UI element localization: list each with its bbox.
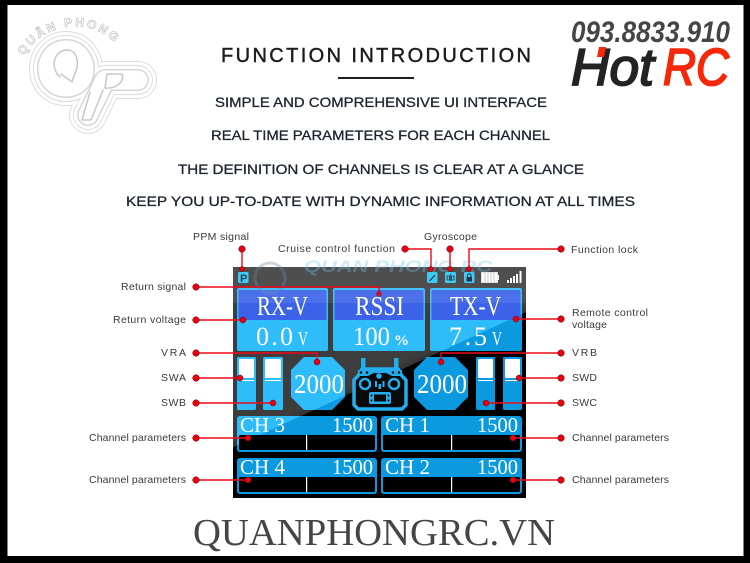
feature list: SIMPLE AND COMPREHENSIVE UI INTERFACE <box>215 94 547 110</box>
channel: CH 3: 1500 <box>332 413 373 437</box>
card: RX-V <box>237 288 328 351</box>
title underline <box>338 77 414 79</box>
brand: HotRC: Hot <box>571 39 657 97</box>
signal bars icon <box>507 271 522 283</box>
status icon: lock <box>464 272 474 283</box>
footer website: QUANPHONGRC.VN <box>193 512 555 554</box>
callout labels: voltage <box>572 319 607 331</box>
card: TX-V: 7.5 <box>449 322 487 351</box>
callout labels: SWD <box>572 372 597 384</box>
channel: CH 4: CH 4 <box>240 455 286 479</box>
card: RX-V: 0.0 <box>256 322 293 351</box>
card: RX-V: RX-V <box>257 291 308 321</box>
card: TX-V: V <box>492 328 502 350</box>
brand: HotRC <box>571 39 729 97</box>
dial: VRA <box>291 357 345 410</box>
callout labels: VRB <box>572 347 597 359</box>
feature list <box>126 94 635 209</box>
callout labels: Channel parameters <box>89 432 186 444</box>
slider: SWB <box>263 357 283 410</box>
callout lines and dots <box>193 246 564 483</box>
slider: SWC <box>476 357 495 410</box>
card: TX-V: TX-V <box>450 291 501 321</box>
feature list: THE DEFINITION OF CHANNELS IS CLEAR AT A GLANCE <box>178 161 584 177</box>
screen watermark <box>255 257 493 293</box>
icon: remote controller <box>354 358 406 409</box>
channel: CH 2 <box>381 455 522 494</box>
slider: SWD <box>503 357 522 410</box>
phone number: 093.8833.910 <box>571 16 730 49</box>
callout labels: Cruise control function <box>278 243 395 255</box>
channel: CH 2: CH 2 <box>385 455 430 479</box>
callout labels: Channel parameters <box>572 474 669 486</box>
callout labels: Return voltage <box>113 314 186 326</box>
feature list: REAL TIME PARAMETERS FOR EACH CHANNEL <box>211 127 550 143</box>
logo: Quan Phong QP watermark <box>48 50 138 120</box>
screen watermark: QUAN PHONG RC <box>304 257 493 276</box>
dial: VRB: 2000 <box>417 369 467 399</box>
channel: CH 3 <box>237 413 377 452</box>
callout labels: Function lock <box>571 244 639 256</box>
slider: SWA <box>237 357 256 410</box>
card: RX-V: V <box>298 328 308 350</box>
callout labels: PPM signal <box>193 231 249 243</box>
battery icon <box>482 272 499 282</box>
card: RSSI: % <box>394 333 409 349</box>
callout labels: Gyroscope <box>424 231 477 243</box>
card: RSSI <box>333 288 425 351</box>
channel: CH 1: 1500 <box>477 413 518 437</box>
feature list: KEEP YOU UP-TO-DATE WITH DYNAMIC INFORMATION AT ALL TIMES <box>126 193 635 209</box>
brand: HotRC: RC <box>663 39 729 97</box>
dial: VRA: 2000 <box>294 369 344 399</box>
callout labels: Remote control <box>572 307 648 319</box>
channel: CH 1 <box>381 413 522 452</box>
logo text: QUÂN PHONG <box>18 18 118 54</box>
callout labels: SWA <box>161 372 186 384</box>
status bar: P icon <box>238 272 248 285</box>
callout labels <box>89 231 669 486</box>
callout labels: Channel parameters <box>89 474 186 486</box>
channel: CH 3: CH 3 <box>240 413 285 437</box>
status icon: cruise <box>427 272 438 283</box>
card: RSSI: 100 <box>353 322 390 351</box>
dial: VRB <box>414 357 468 410</box>
channel: CH 4: 1500 <box>332 455 373 479</box>
top screen glare <box>233 267 526 303</box>
callout labels: Channel parameters <box>572 432 669 444</box>
channel: CH 2: 1500 <box>477 455 518 479</box>
channel: CH 1: CH 1 <box>385 413 430 437</box>
card: TX-V <box>430 288 522 351</box>
channel: CH 4 <box>237 455 377 494</box>
card: RSSI: RSSI <box>355 291 404 321</box>
callout labels: SWC <box>572 397 597 409</box>
callout labels: SWB <box>161 397 186 409</box>
callout labels: VRA <box>161 347 186 359</box>
controller screen <box>233 257 526 498</box>
callout labels: Return signal <box>121 281 186 293</box>
title: FUNCTION INTRODUCTION <box>221 45 531 67</box>
status bar: P icon: P <box>240 273 247 285</box>
status icon: gyroscope <box>445 272 456 283</box>
